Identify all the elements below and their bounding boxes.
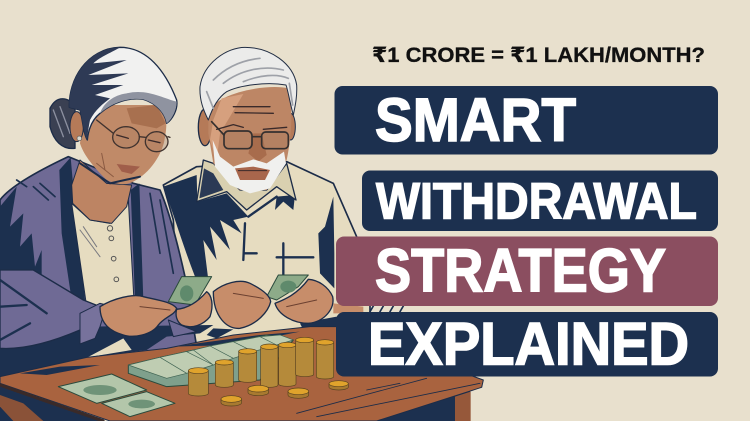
wooden table	[0, 327, 483, 421]
hands holding banknotes	[100, 275, 403, 336]
illustration: man and woman counting money	[0, 47, 370, 367]
stacks of gold coins	[188, 337, 348, 406]
subtitle question: ₹1 CRORE = ₹1 LAKH/MONTH?	[372, 44, 705, 67]
man: shirt	[163, 160, 370, 363]
banner: EXPLAINED: EXPLAINED	[368, 310, 689, 378]
woman: sleeve	[0, 270, 337, 377]
stacks of banknotes	[58, 335, 293, 417]
banner: WITHDRAWAL: WITHDRAWAL	[376, 172, 697, 230]
woman: head and face	[50, 47, 177, 223]
foreground: hands, table, money and coins	[0, 270, 483, 421]
banner: STRATEGY: STRATEGY	[375, 236, 666, 304]
man: head and face	[198, 47, 297, 193]
banner: SMART: SMART	[375, 86, 576, 154]
banner: SMART	[334, 86, 718, 154]
woman: cardigan	[0, 157, 200, 367]
